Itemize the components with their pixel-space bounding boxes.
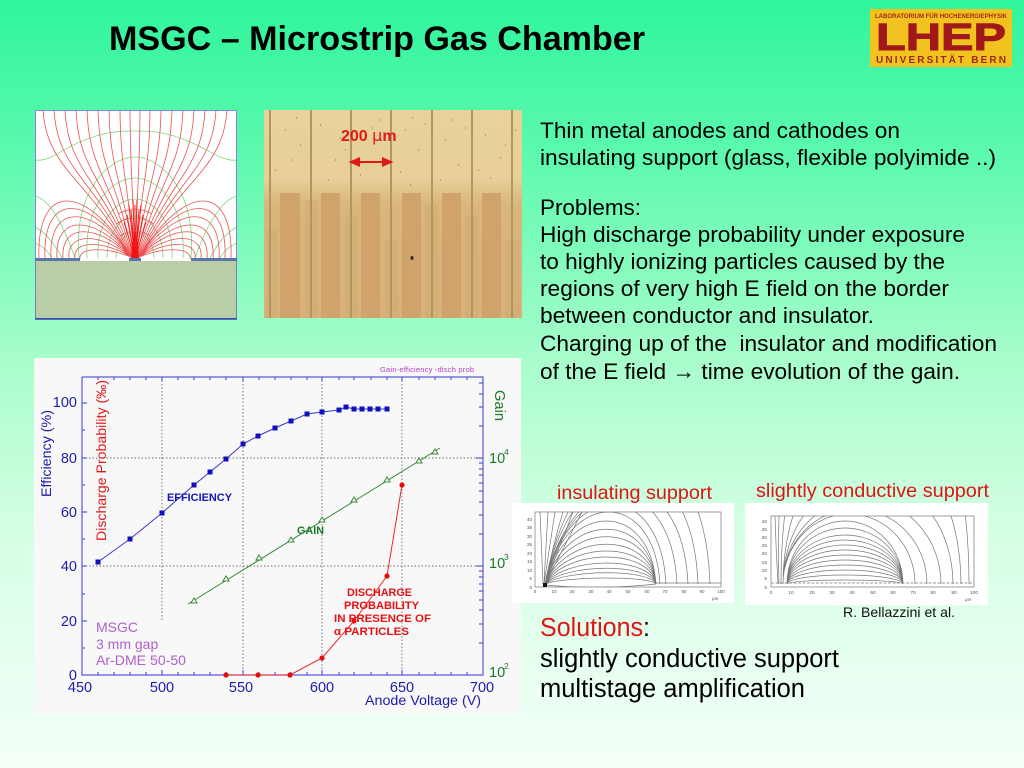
left axis labels: 40 <box>61 559 77 575</box>
text block: problems: of the E field → time evolution of the gain. <box>540 359 960 384</box>
credit: R. Bellazzini et al. <box>843 604 955 620</box>
gain axis labels: 3 <box>504 552 509 562</box>
label: chamber parameters <box>96 619 186 668</box>
efficiency curve <box>96 404 390 564</box>
plot: field lines with slightly conductive support: 70 <box>910 590 916 596</box>
text block: problems <box>540 195 997 384</box>
y axis title: discharge probability: Discharge Probability (‰) <box>93 380 109 541</box>
substrate <box>35 261 237 318</box>
grid lines <box>82 377 483 675</box>
plot: field lines with slightly conductive support: 60 <box>890 590 896 596</box>
label: discharge probability <box>334 587 431 638</box>
axis labels <box>762 519 767 591</box>
green equipotential lines <box>35 131 237 258</box>
x axis title: Anode Voltage (V) <box>365 693 481 709</box>
panel: electric field map <box>35 110 237 320</box>
label: efficiency: EFFICIENCY <box>167 492 233 504</box>
plot: field lines with insulating support: 100 <box>717 589 725 594</box>
axis labels: 15 <box>527 559 532 564</box>
axis labels <box>527 517 532 590</box>
red field lines <box>43 110 227 258</box>
gain axis labels: 2 <box>504 661 509 671</box>
left axis labels: 100 <box>53 395 77 411</box>
label: discharge probability: α PARTICLES <box>334 626 410 638</box>
label: discharge probability: PROBABILITY <box>344 600 420 612</box>
plot: field lines with slightly conductive support: 90 <box>951 590 957 596</box>
text block: solutions: Solutions: <box>540 614 650 642</box>
electrodes <box>35 258 237 261</box>
left axis labels: 80 <box>61 451 77 467</box>
x axis labels <box>68 680 494 696</box>
text block: problems: Charging up of the insulator and modification <box>540 331 997 356</box>
plot: field lines with insulating support: 60 <box>644 589 650 594</box>
x axis labels: 700 <box>470 680 494 696</box>
label: chamber parameters: MSGC <box>96 619 138 635</box>
left axis labels: 0 <box>69 668 77 684</box>
plot: field lines with insulating support <box>521 503 734 603</box>
discharge probability curve <box>223 482 405 678</box>
gain axis labels <box>489 447 509 681</box>
left axis labels: 60 <box>61 505 77 521</box>
axis labels: 20 <box>527 551 532 556</box>
x axis labels: 650 <box>390 680 414 696</box>
panel: micrograph of anodes and cathodes <box>264 110 522 318</box>
label: discharge probability: IN PRESENCE OF <box>334 613 431 625</box>
text block: problems: Problems: <box>540 195 641 220</box>
text block: problems: regions of very high E field on the border <box>540 276 949 301</box>
label: discharge probability: DISCHARGE <box>347 587 413 599</box>
anode strips <box>270 110 512 318</box>
chart: gain, efficiency and discharge probability vs anode voltage <box>34 358 521 713</box>
plot: field lines with insulating support: 50 <box>625 589 631 594</box>
plot: field lines with insulating support: 40 <box>606 589 612 594</box>
axis labels: 0 <box>764 585 767 591</box>
plot: field lines with slightly conductive support <box>745 503 988 605</box>
label: gain: GAIN <box>297 525 324 537</box>
plot: field lines with insulating support: 0 <box>534 589 537 594</box>
text block: solutions: multistage amplification <box>540 675 805 703</box>
plot: field lines with slightly conductive support: 40 <box>849 590 855 596</box>
label: chamber parameters: 3 mm gap <box>96 636 158 652</box>
axes and ticks <box>82 377 483 675</box>
axis labels: 40 <box>527 517 532 522</box>
red side lobes <box>39 201 231 259</box>
label: chamber parameters: Ar-DME 50-50 <box>96 652 186 668</box>
plot: field lines with slightly conductive support: 0 <box>770 590 773 596</box>
axis labels: 30 <box>527 534 532 539</box>
y axis title: gain: Gain <box>491 390 507 421</box>
plot: field lines with slightly conductive support: 10 <box>788 590 794 596</box>
axis labels: 30 <box>762 535 767 541</box>
text block: description: Thin metal anodes and cathodes on <box>540 118 900 143</box>
plot: field lines with slightly conductive support: 80 <box>930 590 936 596</box>
plot: field lines with slightly conductive support: 30 <box>829 590 835 596</box>
text block: problems: to highly ionizing particles caused by the <box>540 249 945 274</box>
x axis labels: 450 <box>68 680 92 696</box>
plot: field lines with insulating support: μm <box>712 596 719 601</box>
axis labels: 25 <box>527 542 532 547</box>
plot: field lines with slightly conductive support: μm <box>965 597 972 602</box>
plot: field lines with slightly conductive support: 20 <box>809 590 815 596</box>
axis labels: 35 <box>527 525 532 530</box>
logo: LHEP Universität Bern <box>870 9 1012 67</box>
text block: solutions: slightly conductive support <box>540 645 839 673</box>
bright red fan at anode <box>124 200 146 250</box>
title: MSGC – Microstrip Gas Chamber <box>109 20 645 58</box>
cathode fingers <box>280 193 501 318</box>
scale arrow <box>351 158 391 166</box>
text block: solutions <box>540 614 839 703</box>
shaded patches <box>266 200 520 318</box>
plot: field lines with slightly conductive support: 50 <box>870 590 876 596</box>
gain curve <box>188 448 440 604</box>
left axis labels <box>53 395 77 684</box>
plot title: Gain-efficiency -disch prob <box>380 365 474 374</box>
y axis title: efficiency: Efficiency (%) <box>39 410 55 497</box>
plot: field lines with insulating support: 20 <box>569 589 575 594</box>
heading: insulating support: insulating support <box>557 482 712 504</box>
axis labels: 40 <box>762 519 767 525</box>
plot: field lines with insulating support: 30 <box>588 589 594 594</box>
axis labels: 10 <box>762 568 767 574</box>
left axis labels: 20 <box>61 614 77 630</box>
x axis labels: 500 <box>150 680 174 696</box>
heading: slightly conductive support: slightly conductive support <box>756 480 989 502</box>
x axis labels: 550 <box>229 680 253 696</box>
logo: LHEP Universität Bern: LABORATORIUM FÜR HOCHENERGIEPHYSIK <box>875 11 1007 20</box>
axis labels: 15 <box>762 560 767 566</box>
logo: LHEP Universität Bern: UNIVERSITÄT BERN <box>876 53 1006 66</box>
gain axis labels: 10 <box>489 665 505 681</box>
axis labels: 5 <box>529 576 532 581</box>
text block: problems: between conductor and insulator. <box>540 303 874 328</box>
plot: field lines with slightly conductive support: 100 <box>970 590 978 596</box>
plot: field lines with insulating support: 80 <box>681 589 687 594</box>
axis labels: 5 <box>764 576 767 582</box>
gain axis labels: 10 <box>489 451 505 467</box>
axis labels: 0 <box>529 585 532 590</box>
plot: field lines with insulating support: 90 <box>699 589 705 594</box>
text block: problems: High discharge probability under exposure <box>540 222 965 247</box>
axis labels: 35 <box>762 527 767 533</box>
gain axis labels: 10 <box>489 556 505 572</box>
plot: field lines with insulating support: 70 <box>662 589 668 594</box>
plot: field lines with insulating support: 10 <box>551 589 557 594</box>
axis labels: 20 <box>762 551 767 557</box>
scale label: 200 μm <box>341 126 397 145</box>
axis labels: 10 <box>527 568 532 573</box>
text block: description: insulating support (glass, flexible polyimide ..) <box>540 145 996 170</box>
logo: LHEP Universität Bern: LHEP <box>876 17 1006 59</box>
axis labels: 25 <box>762 543 767 549</box>
gain axis labels: 4 <box>504 447 509 457</box>
speckles <box>275 118 516 185</box>
x axis labels: 600 <box>310 680 334 696</box>
text block: description <box>540 118 996 170</box>
